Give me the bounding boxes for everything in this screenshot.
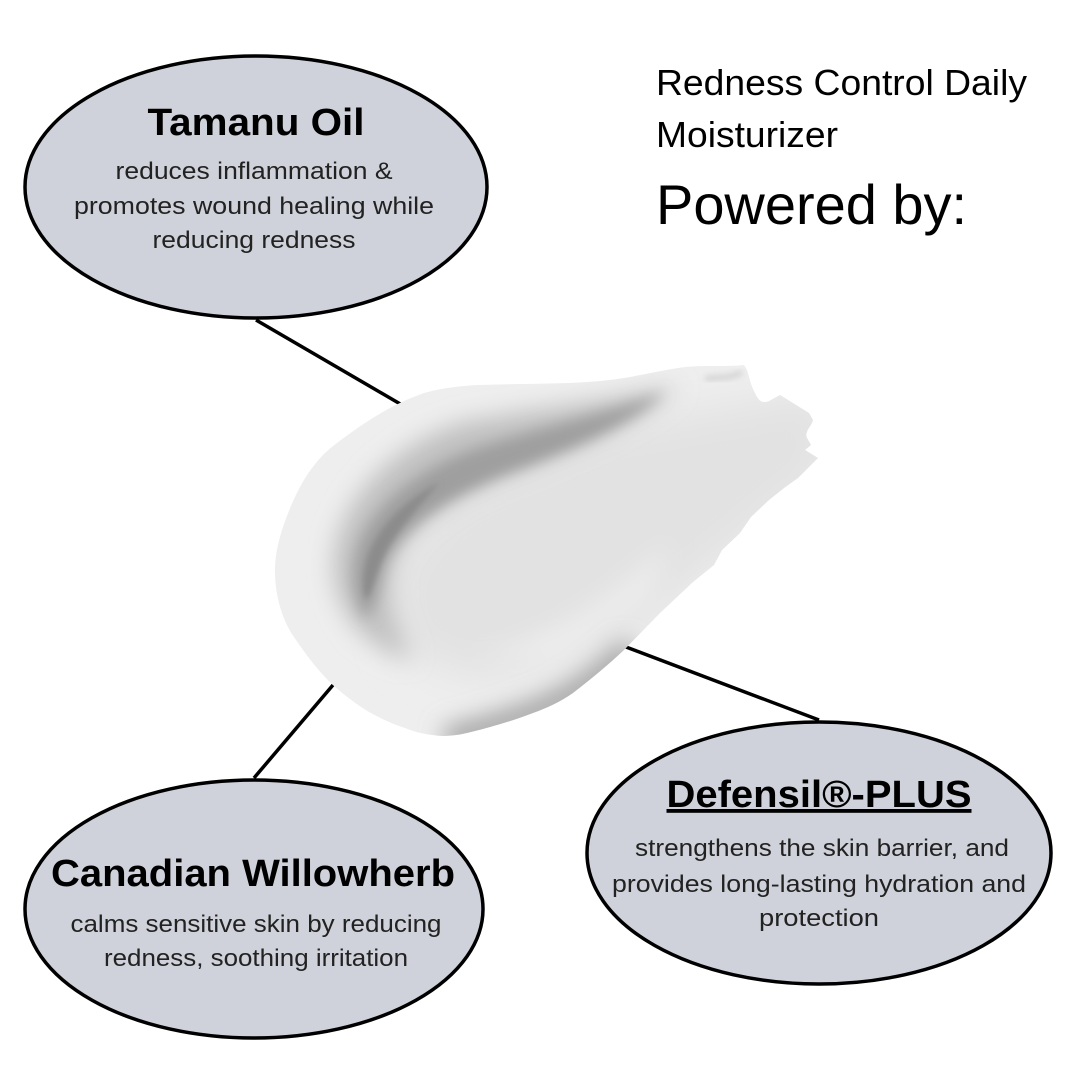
description: Defensil-PLUS: strengthens the skin barrier, and [635,835,1009,862]
cream swatch [275,365,818,736]
connector: Defensil-PLUS to cream [626,647,819,720]
description: Canadian Willowherb: redness, soothing irritation [104,945,408,972]
title: Moisturizer [656,114,838,155]
description: Tamanu Oil: reduces inflammation & [116,158,392,185]
description: Canadian Willowherb: calms sensitive skin by reducing [70,911,442,938]
description: Defensil-PLUS [612,835,1026,932]
description: Defensil-PLUS: protection [759,905,879,932]
description: Tamanu Oil: reducing redness [152,227,356,254]
title: Redness Control Daily [656,62,1027,103]
description: Defensil-PLUS: provides long-lasting hydration and [612,871,1026,898]
ellipse: Canadian Willowherb [25,780,483,1038]
subtitle: Powered by: Powered by: [656,173,967,236]
connector: Canadian Willowherb to cream [254,685,333,778]
heading: Tamanu Oil: Tamanu Oil [148,102,364,144]
ellipse: Tamanu Oil [25,56,487,318]
ellipse: Defensil-PLUS [587,722,1051,984]
description: Tamanu Oil: promotes wound healing while [74,193,434,220]
heading: Canadian Willowherb: Canadian Willowherb [51,853,455,895]
title [656,62,1027,236]
description: Canadian Willowherb [70,911,442,972]
heading: Defensil-PLUS: Defensil®-PLUS [666,774,972,816]
description: Tamanu Oil [74,158,434,254]
connector: Tamanu Oil to cream [256,320,402,405]
